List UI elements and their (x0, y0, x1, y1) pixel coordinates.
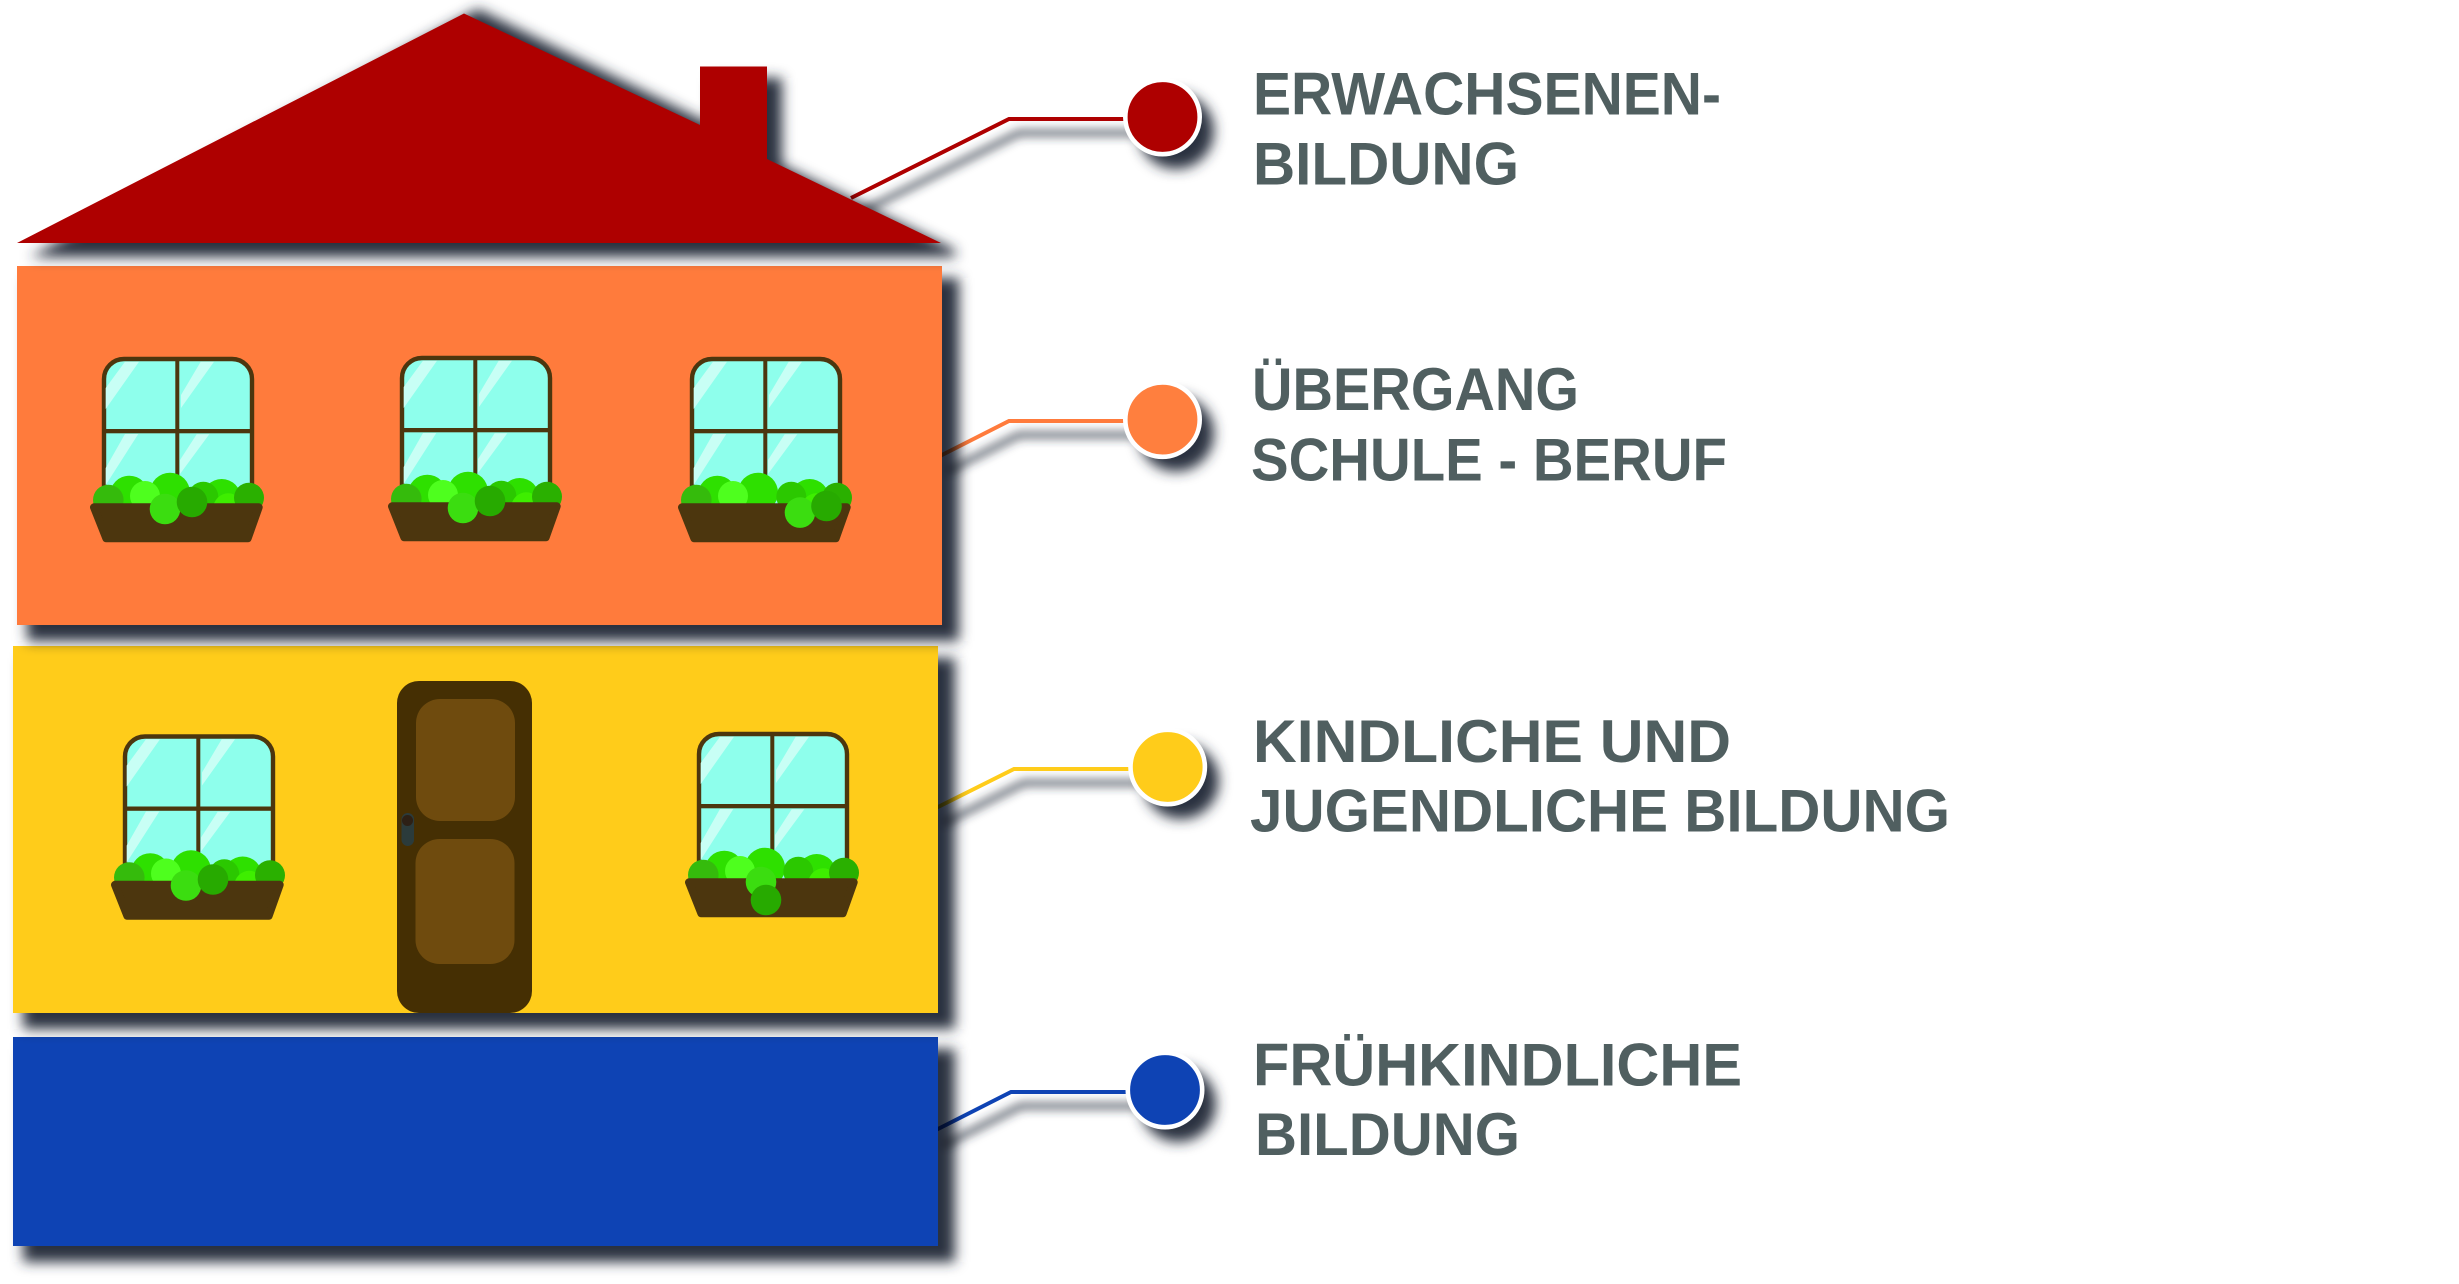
door (397, 681, 532, 1013)
label: Erwachsenenbildung: ERWACHSENEN- (1253, 60, 1721, 128)
window: yellow floor right (688, 734, 859, 915)
marker dot: yellow (1130, 730, 1219, 819)
label: frühkindliche Bildung: BILDUNG (1255, 1100, 1520, 1168)
connector: kindliche und jugendliche Bildung (934, 769, 1145, 823)
house floor: orange upper floor (17, 266, 959, 641)
label: frühkindliche Bildung (1253, 1031, 1742, 1168)
label: Erwachsenenbildung: BILDUNG (1253, 129, 1519, 197)
window: yellow floor left (114, 736, 285, 916)
label: kindliche und jugendliche Bildung: KINDLICHE UND (1253, 707, 1731, 775)
window: orange floor left (93, 359, 264, 538)
marker dot: blue (1128, 1053, 1216, 1142)
roof with chimney (17, 9, 955, 257)
house floor: yellow ground floor (13, 646, 955, 1029)
label: Übergang Schule-Beruf: SCHULE - BERUF (1251, 426, 1727, 494)
marker dot: orange (1125, 382, 1214, 472)
label: Erwachsenenbildung (1253, 60, 1721, 197)
window: orange floor middle (391, 358, 562, 537)
label: frühkindliche Bildung: FRÜHKINDLICHE (1253, 1031, 1742, 1099)
label: Übergang Schule-Beruf: ÜBERGANG (1252, 355, 1579, 423)
label: Übergang Schule-Beruf (1251, 355, 1727, 494)
window: orange floor right (681, 359, 852, 538)
label: kindliche und jugendliche Bildung (1250, 707, 1950, 844)
connector: Erwachsenenbildung (851, 119, 1140, 212)
connector: frühkindliche Bildung (934, 1092, 1142, 1145)
house floor: blue foundation (13, 1037, 955, 1262)
marker dot: red (1125, 80, 1214, 169)
label: kindliche und jugendliche Bildung: JUGENDLICHE BILDUNG (1250, 776, 1950, 844)
connector: Übergang Schule-Beruf (938, 421, 1140, 471)
